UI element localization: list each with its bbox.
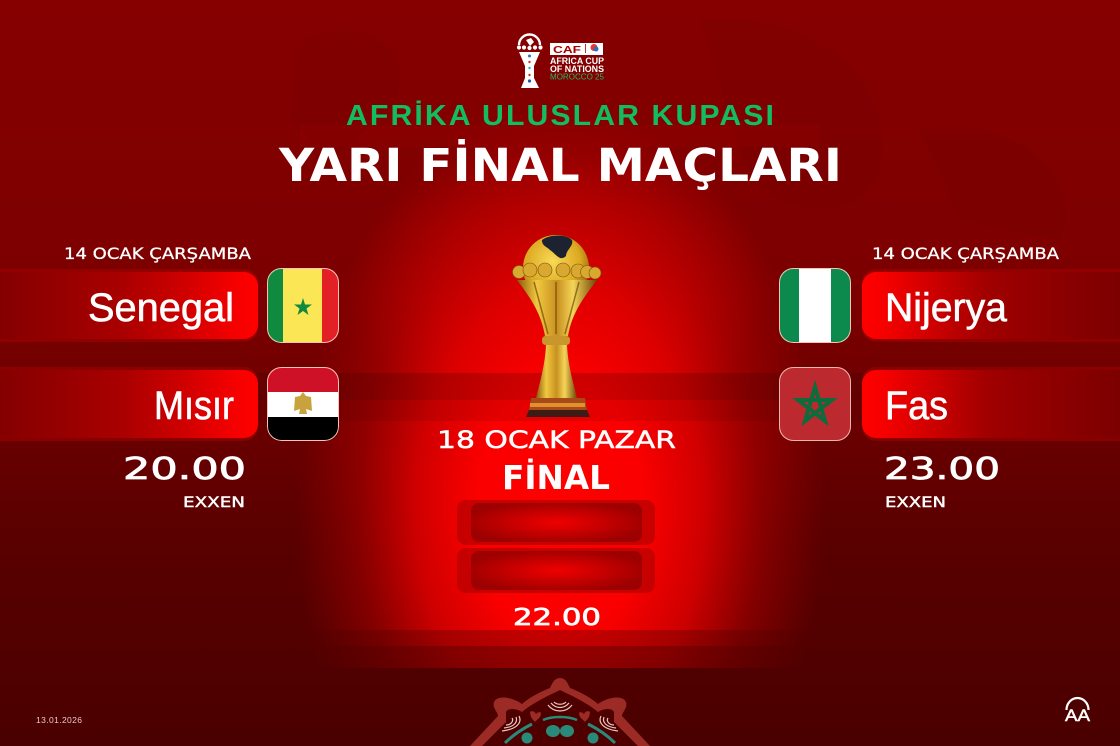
empty team slot 2 [457,548,655,593]
team row: Nijerya: Nijerya [885,286,1008,330]
title: YARI FİNAL MAÇLARI [278,139,842,192]
empty team slot 1 [457,500,655,545]
flag: Nigeria [779,268,851,343]
match date: 14 OCAK ÇARŞAMBA [64,244,251,263]
team row: Nijerya [862,269,1120,342]
final date: 18 OCAK PAZAR [437,426,676,454]
ornament [470,678,650,746]
teal motif [505,717,615,744]
team row: Mısır: Mısır [154,384,234,428]
flag: Senegal [267,268,339,343]
team row: Fas [862,367,1120,441]
kickoff time: 20.00 [123,452,246,487]
final heading: FİNAL [502,457,610,497]
icon: news agency logo [1065,698,1091,725]
tournament logo: OF NATIONS [550,64,604,75]
icon: cup emblem [517,34,543,88]
panel: final [437,426,676,631]
icon: news agency logo: AA [1065,706,1091,725]
tournament logo [517,34,605,88]
logo text: AFRICA CUP [550,56,605,67]
publication date: 13.01.2026 [36,715,82,725]
final kickoff time: 22.00 [513,605,601,631]
panel: left semi-final [0,244,339,511]
subtitle: AFRİKA ULUSLAR KUPASI [346,100,776,132]
flag: Morocco [780,368,850,440]
team row: Senegal [0,269,258,342]
flag: Egypt [267,367,339,441]
team row: Mısır [0,367,258,441]
tournament logo: MOROCCO 25 [550,72,604,82]
broadcaster: EXXEN [183,495,245,511]
caf badge: CAF [553,44,582,56]
panel: right semi-final [779,244,1120,511]
broadcaster: EXXEN [885,495,946,511]
kickoff time: 23.00 [884,452,1000,487]
team row: Senegal: Senegal [88,286,234,330]
match date: 14 OCAK ÇARŞAMBA [872,244,1059,263]
team row: Fas: Fas [885,384,948,428]
icon: trophy [512,235,601,417]
